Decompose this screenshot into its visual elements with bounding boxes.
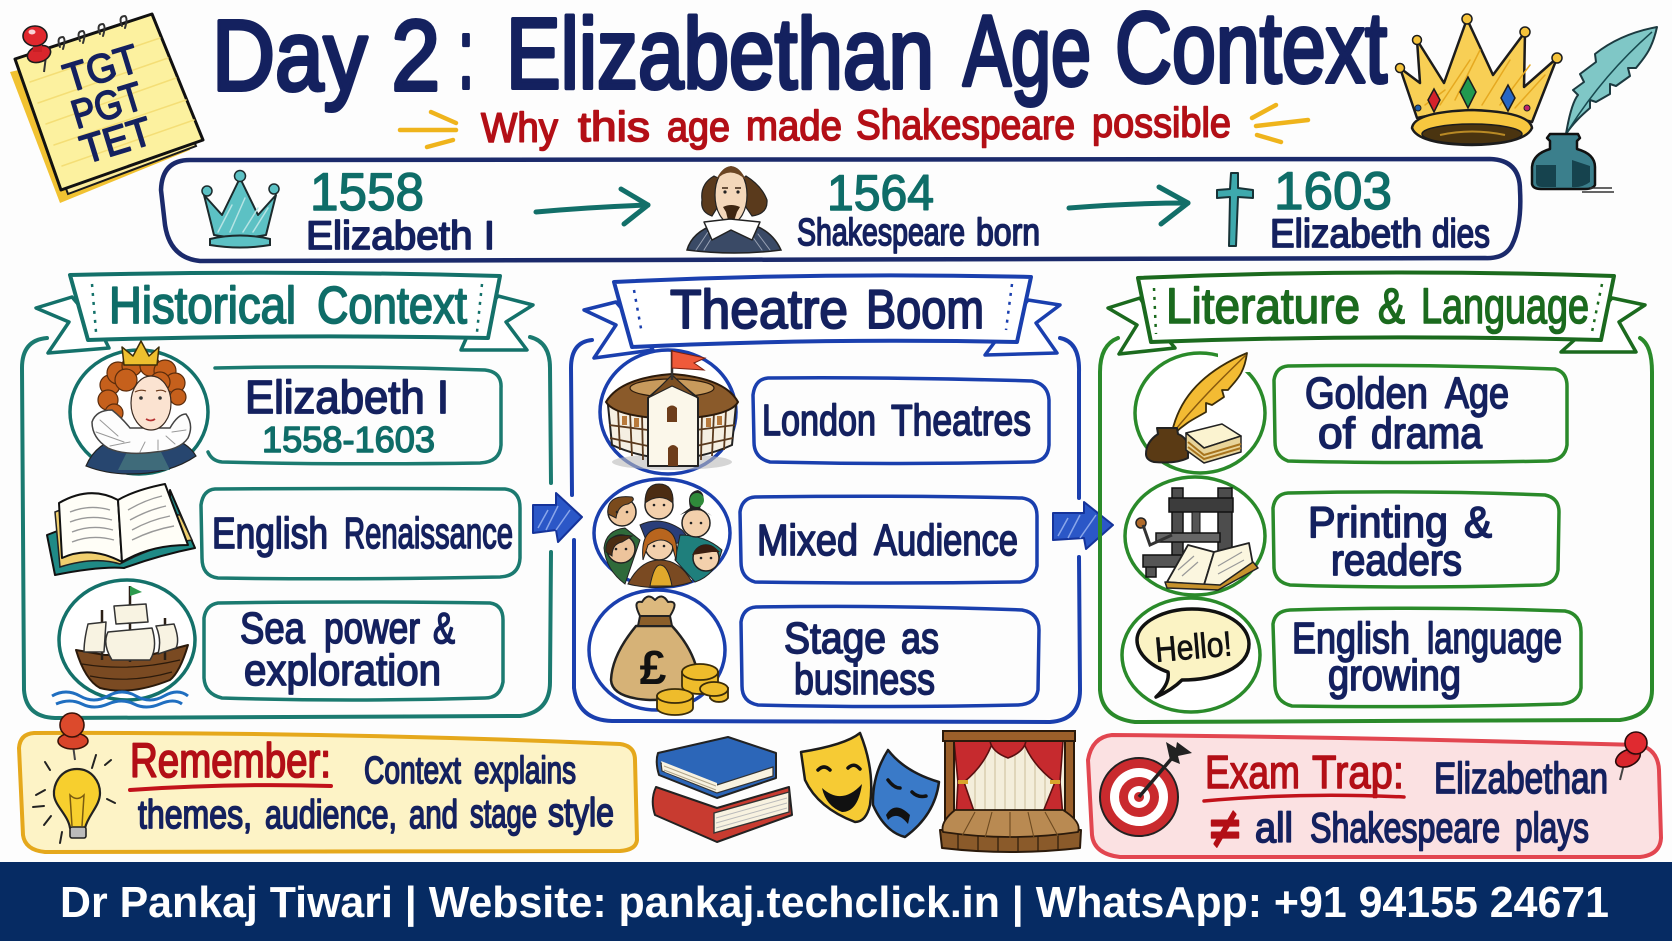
heading banner: Literature and Language: Literature [1166,278,1360,334]
item box: Elizabeth I: 1558-1603 [262,419,435,460]
callout: exam trap: Trap: [1312,746,1404,798]
item box: English language growing: language [1427,614,1562,663]
item box: London Theatres [753,378,1049,464]
icon: right accent dashes [1252,105,1308,142]
item box: Sea power and exploration: Sea [240,604,305,653]
panel: historical context [22,273,551,718]
heading banner: Theatre Boom: Theatre [670,278,848,340]
subtitle: Why [481,104,558,151]
callout: exam trap: Shakespeare [1310,804,1500,851]
icon: stack of books [653,737,792,842]
icon: Globe theatre in circle [600,350,738,474]
item box: Printing and readers: & [1464,498,1492,547]
item box: London Theatres: Theatres [891,396,1031,445]
icon: open book [47,484,195,575]
icon: money bag in circle [589,590,728,715]
icon: theatre masks [801,733,939,837]
subtitle: this [578,103,650,150]
heading banner: Literature and Language: & [1378,278,1405,334]
callout: remember: themes, [138,793,252,837]
callout: remember: Context [364,750,461,792]
icon: teal crown [202,170,279,248]
item box: Elizabeth I: Elizabeth I [245,371,449,423]
heading banner: Literature and Language: Language [1421,278,1589,334]
title [212,0,1387,112]
callout: exam trap: Exam [1205,746,1300,798]
item box: Stage as business: Stage [784,614,886,663]
sticky note: TGT PGT TET: TET [75,109,157,173]
sticky note: TGT PGT TET: PGT [66,74,148,138]
item box: Mixed Audience [740,496,1037,583]
icon: teal feather in ink bottle [1532,27,1657,192]
item box: Elizabeth I [208,367,501,464]
1564 milestone: Shakespeare [797,212,965,254]
item box: Sea power and exploration: & [433,604,455,653]
callout: exam trap: plays [1515,804,1589,851]
item box: Sea power and exploration: power [324,604,420,653]
item box: English language growing: growing [1328,651,1461,700]
item box: Stage as business: business [794,655,935,704]
icon: gold crown [1396,14,1562,145]
item box: Golden Age of drama [1274,365,1567,462]
icon: money bag in circle: £ [640,642,667,695]
icon: red pin [1613,732,1647,780]
1603 milestone [1270,162,1490,256]
item box: Stage as business [741,606,1039,706]
icon: target with arrow [1100,742,1192,836]
item box: Printing and readers [1273,492,1559,587]
item box: Golden Age of drama: drama [1371,409,1482,458]
callout: exam trap: ≠ [1207,793,1243,863]
icon: ship in circle [52,580,195,707]
heading banner: Theatre Boom: Boom [866,278,984,340]
item box: Printing and readers: readers [1331,536,1462,585]
title: Day 2 [212,0,440,112]
icon: light bulb [33,755,115,843]
item box: Mixed Audience: Audience [874,516,1018,565]
1558 milestone: Elizabeth I [306,214,495,258]
callout: remember: and [409,793,458,837]
title: : [458,0,474,110]
callout: remember: style [548,791,614,835]
item box: Golden Age of drama: Golden [1305,369,1428,418]
footer bar [0,862,1672,941]
arrow: historical to theatre [533,493,582,542]
arrow [536,189,648,224]
icon: red pin [58,713,88,760]
panel: theatre boom [571,275,1080,722]
heading banner: Literature and Language [1108,272,1645,354]
item box: London Theatres: London [762,396,876,445]
item: Elizabeth I portrait [70,341,208,474]
footer bar: Dr Pankaj Tiwari | Website: pankaj.techclick.in | WhatsApp: +91 94155 24671 [60,879,1609,928]
1564 milestone: 1564 [827,165,934,221]
icon: printing press in circle [1125,477,1265,595]
icon: left accent dashes [400,112,456,147]
item box: Stage as business: as [901,614,939,663]
item box: Sea power and exploration [204,602,503,700]
item box: English language growing [1273,608,1581,707]
1603 milestone: 1603 [1274,162,1392,221]
subtitle: possible [1092,99,1231,146]
1603 milestone: dies [1432,212,1490,256]
callout: remember: Remember: [130,735,331,788]
callout: exam trap: all [1255,804,1293,851]
callout: remember: explains [474,750,576,792]
arrow: theatre to literature [1053,502,1113,549]
callout: exam trap [1088,732,1661,863]
item box: English Renaissance [201,488,520,579]
callout: remember [19,713,637,852]
item box: Golden Age of drama: of [1318,409,1356,458]
subtitle: Shakespeare [856,101,1075,148]
heading banner: Historical Context: Context [317,277,467,335]
item box: Mixed Audience: Mixed [757,516,858,565]
subtitle [481,99,1231,151]
subtitle: age [667,103,730,150]
heading banner: Historical Context [36,273,533,353]
heading banner: Theatre Boom [584,275,1060,358]
icon: crowd in circle [594,479,730,588]
panel: literature and language [1100,272,1652,722]
icon: cross [1217,173,1253,246]
callout: remember: stage [470,792,537,836]
icon: Hello speech bubble in circle [1122,598,1260,712]
subtitle: made [746,102,842,149]
item box: Golden Age of drama: Age [1445,369,1509,418]
title: Elizabethan [506,0,934,110]
1603 milestone: Elizabeth [1270,212,1422,256]
icon: Shakespeare portrait [687,166,781,253]
sticky note: TGT PGT TET [10,14,203,203]
callout: exam trap: Elizabethan [1434,754,1608,803]
item box: Sea power and exploration: exploration [244,646,441,695]
heading banner: Historical Context: Historical [109,277,296,335]
1564 milestone: born [976,212,1040,254]
1558 milestone: 1558 [310,163,424,222]
callout: remember: audience, [265,793,397,837]
sticky note: TGT PGT TET: TGT [59,37,144,101]
item box: English language growing: English [1292,614,1410,663]
icon: theatre stage [940,731,1081,852]
arrow [1069,187,1188,224]
icon: gold quill and books in circle [1135,350,1265,473]
icon: Hello speech bubble in circle: Hello! [1153,624,1233,670]
timeline bar [161,159,1520,261]
1564 milestone [797,165,1040,254]
1558 milestone [306,163,495,258]
item box: Printing and readers: Printing [1308,498,1448,547]
item box: English Renaissance: English [212,509,328,558]
item box: English Renaissance: Renaissance [344,509,513,558]
